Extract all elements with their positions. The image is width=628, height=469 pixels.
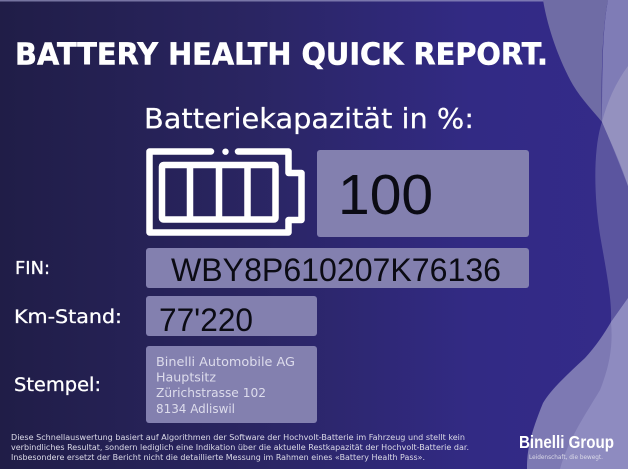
- label: stamp: Stempel:: [14, 375, 101, 396]
- label: FIN: FIN:: [15, 258, 50, 279]
- logo: Binelli Group: Leidenschaft, die bewegt.: [529, 453, 603, 461]
- icon: full battery: [150, 148, 302, 232]
- stamp box: Zürichstrasse 102: [156, 385, 266, 400]
- stamp box: [146, 346, 317, 423]
- stamp box: Binelli Automobile AG: [156, 354, 295, 369]
- stamp box: 8134 Adliswil: [156, 401, 235, 416]
- disclaimer: Insbesondere ersetzt der Bericht nicht die detaillierte Messung im Rahmen eines «Battery Health Pass».: [11, 453, 425, 462]
- decorative waves: [527, 0, 628, 469]
- stamp box: Hauptsitz: [156, 370, 216, 384]
- odometer value box: 77'220: [159, 302, 253, 338]
- logo: Binelli Group: [519, 432, 614, 461]
- capacity value box: [317, 150, 529, 237]
- label: odometer: Km-Stand:: [14, 307, 122, 328]
- capacity value box: 100: [338, 163, 433, 227]
- disclaimer: Diese Schnellauswertung basiert auf Algorithmen der Software der Hochvolt-Batterie im Fahrzeug und stellt kein: [11, 433, 465, 442]
- title: BATTERY HEALTH QUICK REPORT.: [15, 38, 548, 72]
- heading: battery capacity: Batteriekapazität in %:: [144, 103, 474, 135]
- logo: Binelli Group: Binelli Group: [519, 432, 614, 452]
- odometer value box: [146, 296, 317, 338]
- FIN value box: WBY8P610207K76136: [171, 252, 501, 288]
- disclaimer: verbindliches Resultat, sondern lediglich eine Indikation über die aktuelle Restkapazität der Hochvolt-Batterie dar.: [11, 443, 469, 452]
